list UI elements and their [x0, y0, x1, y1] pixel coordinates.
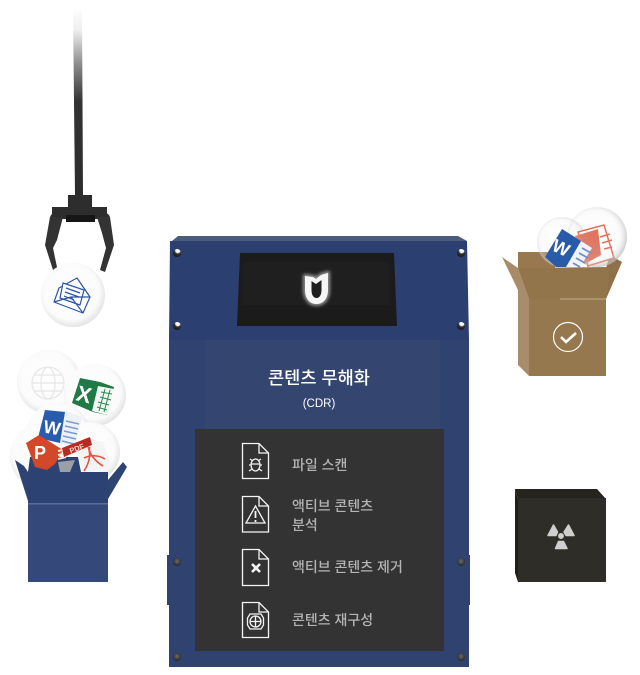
- icon: check circle: [554, 322, 582, 352]
- right claw arm: [97, 217, 114, 272]
- box front upper: [28, 472, 108, 503]
- pdf label: [62, 437, 92, 457]
- box right flap: [606, 255, 622, 299]
- step: active content analysis: 액티브 콘텐츠: [292, 498, 373, 514]
- machine lower panel: [169, 340, 469, 667]
- box left flap: [502, 257, 529, 299]
- machine screen: [237, 253, 397, 326]
- box back flap: [518, 252, 555, 268]
- process panel: [195, 429, 444, 651]
- step: content reconstruction: [242, 602, 373, 638]
- icon: file with warning: [242, 496, 268, 532]
- step: file scan: [242, 444, 347, 478]
- hazard box side: [515, 489, 518, 582]
- right flap: [108, 462, 127, 499]
- word document: W: [549, 235, 573, 261]
- brown box with sanitized documents: [502, 207, 627, 376]
- pdf document: [76, 437, 112, 472]
- powerpoint outline document: [575, 225, 614, 266]
- title text: 콘텐츠 무해화: [268, 368, 370, 388]
- word document: [545, 229, 592, 267]
- dark screws: [173, 558, 465, 661]
- pdf label: PDF: [68, 442, 86, 455]
- box side: [518, 268, 529, 376]
- logo glow: [305, 273, 328, 304]
- icon: radiation: [548, 525, 574, 548]
- step: file scan: 파일 스캔: [292, 457, 347, 473]
- icon: file with bug: [242, 444, 268, 478]
- icon: file with shield: [242, 602, 268, 638]
- glass ball left: [537, 217, 587, 267]
- ball: excel: X: [74, 381, 95, 408]
- email ball: [41, 263, 105, 327]
- robotic claw holding email ball: [41, 8, 114, 327]
- light screws: [173, 249, 465, 330]
- pile of document balls in blue box: [10, 350, 127, 582]
- powerpoint document: P: [34, 443, 46, 463]
- box top panel: [518, 267, 610, 299]
- step: active content analysis: 분석: [292, 517, 318, 533]
- blue box back flap: [28, 457, 81, 472]
- ball: lower right: [60, 422, 120, 482]
- hazard box front: [518, 498, 606, 582]
- claw head: [50, 195, 110, 223]
- step: content reconstruction: 콘텐츠 재구성: [292, 612, 373, 628]
- CDR machine: [167, 236, 470, 667]
- word document: W: [42, 417, 62, 439]
- machine body: [169, 241, 469, 667]
- icon: file with x: [242, 550, 268, 586]
- box front: [529, 299, 606, 376]
- ball: lower left: [10, 423, 76, 489]
- hazard box top: [515, 489, 606, 499]
- blue box: [15, 460, 127, 582]
- claw rod: [73, 8, 83, 195]
- ball: globe: [17, 350, 81, 414]
- left flap: [15, 460, 28, 501]
- glass ball right: [567, 207, 627, 267]
- black hazard box: [515, 489, 606, 582]
- logo: [305, 273, 328, 304]
- word document: [38, 410, 82, 447]
- left claw arm: [45, 217, 63, 272]
- machine top edge: [172, 236, 467, 241]
- box front lower: [28, 503, 108, 582]
- step: active content analysis: [242, 496, 373, 533]
- grey funnel: [58, 460, 75, 472]
- ball: middle: [26, 403, 90, 467]
- step: active content removal: [242, 550, 403, 586]
- step: active content removal: 액티브 콘텐츠 제거: [292, 559, 403, 575]
- ball: excel: [64, 364, 126, 426]
- powerpoint document: [26, 435, 68, 470]
- icon: open envelope: [54, 278, 90, 313]
- subtitle text: (CDR): [303, 398, 335, 410]
